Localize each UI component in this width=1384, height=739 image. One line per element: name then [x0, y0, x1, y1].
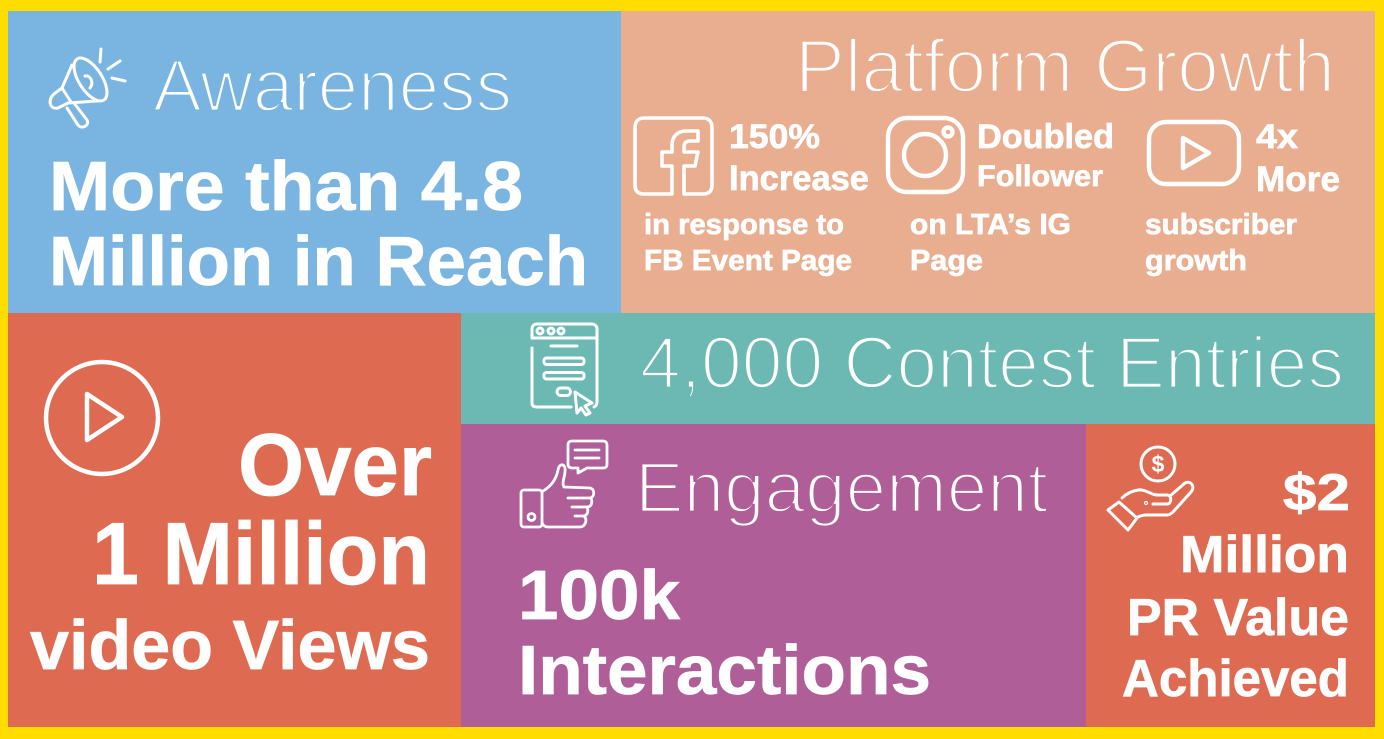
- icon: web form with cursor: [532, 324, 597, 415]
- stat: facebook: in response to: [644, 209, 844, 241]
- stat: instagram: on LTA’s IG: [910, 209, 1071, 241]
- icon: hand holding coin: [1108, 447, 1193, 530]
- text: PR value headline: $2: [1283, 464, 1350, 522]
- heading: contest entries: 4,000 Contest Entries: [640, 323, 1344, 404]
- icon: megaphone: [50, 49, 125, 127]
- text: reach headline: [49, 147, 588, 300]
- icon: thumbs up with speech bubble: [521, 441, 607, 527]
- text: video views headline: Over: [238, 415, 432, 514]
- icon: instagram: [888, 118, 963, 192]
- text: interactions headline: Interactions: [518, 631, 931, 709]
- heading: Engagement: Engagement: [635, 449, 1048, 528]
- text: PR value headline: Million: [1180, 526, 1349, 584]
- stat: instagram: [910, 118, 1114, 277]
- stat: youtube: growth: [1145, 245, 1247, 277]
- text: video views headline: 1 Million: [92, 504, 430, 603]
- stat: instagram: Page: [910, 245, 983, 277]
- heading: Awareness: Awareness: [153, 46, 512, 127]
- panel: platform growth: [621, 11, 1375, 313]
- stat: instagram: Follower: [977, 160, 1103, 193]
- text: video views headline: video Views: [30, 606, 430, 684]
- panel: PR value: [1086, 424, 1375, 727]
- icon: youtube: [1149, 122, 1239, 184]
- text: interactions headline: [518, 556, 931, 709]
- stat: youtube: [1145, 118, 1340, 277]
- text: reach headline: More than 4.8: [49, 147, 523, 225]
- panel: awareness: [8, 11, 621, 313]
- panel: engagement: [461, 424, 1086, 727]
- panel: video views: [8, 313, 461, 727]
- stat: youtube: More: [1256, 160, 1340, 199]
- text: reach headline: Million in Reach: [49, 222, 588, 300]
- stat: instagram: Doubled: [977, 118, 1114, 156]
- text: PR value headline: Achieved: [1122, 650, 1349, 708]
- text: interactions headline: 100k: [518, 556, 680, 634]
- icon: hand holding coin: $: [1152, 451, 1165, 477]
- stat: facebook: [644, 118, 869, 277]
- text: PR value headline: [1122, 464, 1350, 708]
- stat: facebook: Increase: [729, 159, 869, 198]
- heading: Platform Growth: Platform Growth: [795, 24, 1335, 108]
- stat: facebook: 150%: [729, 118, 820, 156]
- panel: contest entries: [461, 313, 1375, 424]
- stat: facebook: FB Event Page: [644, 245, 852, 277]
- icon: facebook: [635, 118, 712, 194]
- text: video views headline: [30, 415, 432, 684]
- text: PR value headline: PR Value: [1127, 589, 1349, 647]
- stat: youtube: subscriber: [1145, 209, 1297, 241]
- stat: youtube: 4x: [1256, 118, 1298, 156]
- icon: play circle: [46, 362, 158, 474]
